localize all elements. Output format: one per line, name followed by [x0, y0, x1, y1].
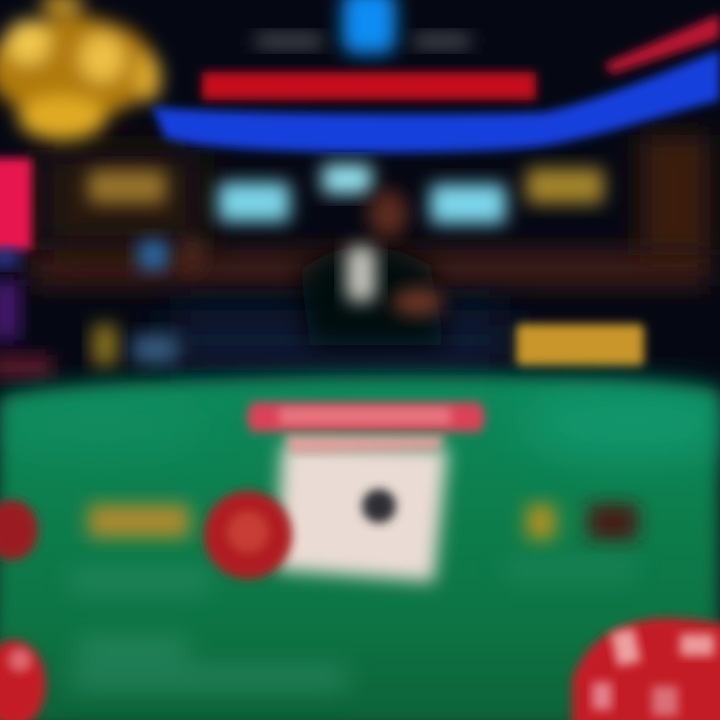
top signage: [152, 0, 720, 153]
gold plaque right: [516, 324, 644, 366]
blue curved band: [152, 50, 720, 153]
gold sign right: [526, 168, 604, 204]
red table banner: [247, 402, 485, 432]
lower wall signs: [92, 324, 644, 366]
table felt: [0, 375, 720, 720]
blue top light: [342, 0, 396, 54]
red banner: [202, 72, 536, 100]
red stripe right: [604, 14, 720, 74]
dealer figure: [180, 190, 445, 345]
red chips bottom right: [572, 618, 720, 720]
side neon lights: [0, 158, 52, 379]
playing card: [276, 436, 448, 582]
pink panel: [0, 158, 32, 250]
faint table captions: [70, 562, 635, 688]
red chip left: [0, 500, 38, 560]
grey sign text left: [256, 34, 322, 48]
background: dark casino hall: [0, 0, 720, 400]
blue glow: [138, 240, 168, 270]
gold sign left: [88, 170, 166, 204]
purple panel: [0, 280, 20, 340]
red chip centre: [204, 491, 292, 579]
chandelier: [0, 0, 161, 140]
red chips bottom left: [0, 640, 46, 720]
card dark circle: [362, 489, 396, 523]
gold mark left: [92, 324, 118, 366]
back wall screens: [88, 164, 604, 270]
cyan screen centre: [322, 164, 372, 194]
cyan screen right: [430, 184, 506, 224]
gold text left: [88, 504, 190, 538]
blue mark left: [132, 334, 178, 364]
grey sign text right: [414, 34, 470, 48]
gold and dark marks right: [526, 504, 638, 540]
cyan screen left: [218, 182, 290, 222]
